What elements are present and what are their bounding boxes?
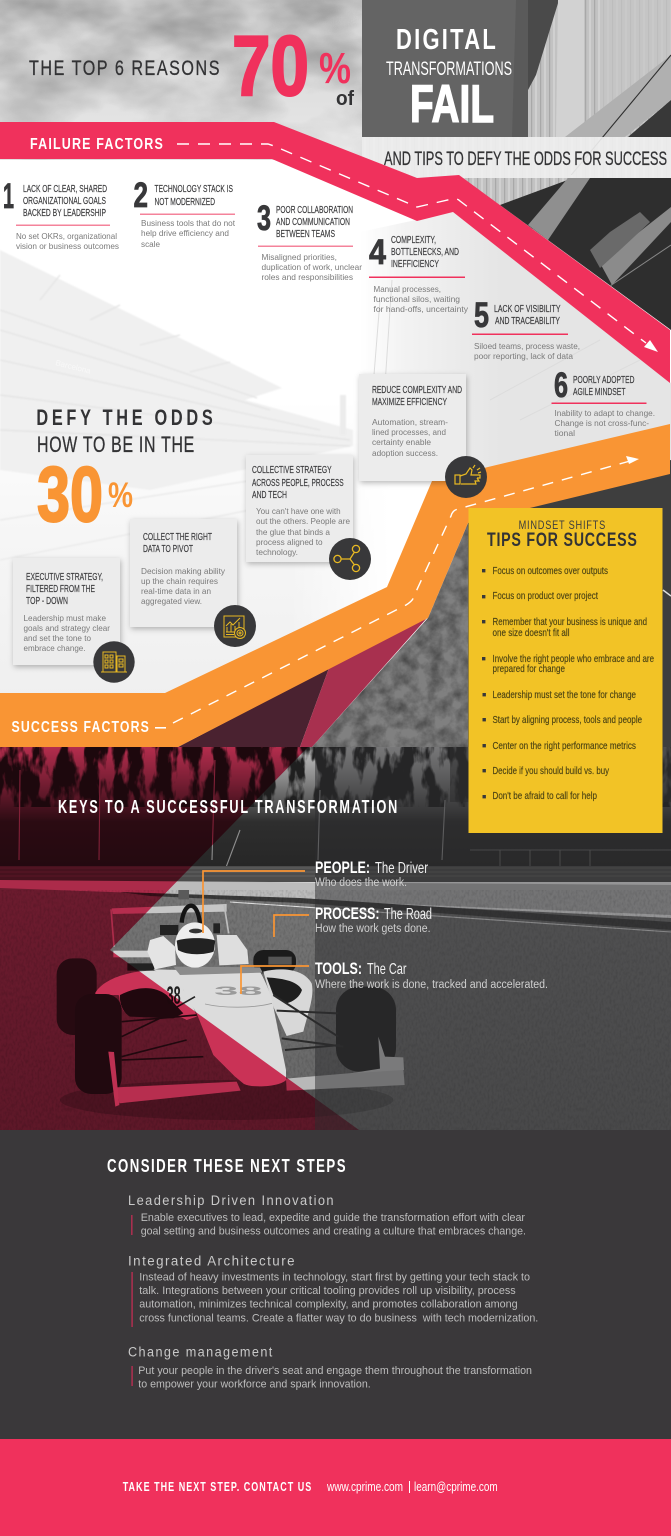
background: building facade xyxy=(362,0,671,330)
photo: racing car on track xyxy=(0,747,671,1130)
failure factor 2 xyxy=(134,176,236,249)
callout: people: The Driver xyxy=(375,860,428,877)
tips list: prepared for change xyxy=(492,663,565,675)
white band xyxy=(362,137,671,178)
step: integrated architecture: cross functional teams. Create a flatter way to do business with tech modernization. xyxy=(139,1312,538,1324)
card: collective strategy: You can't have one with xyxy=(256,506,341,516)
big 30 percent: % xyxy=(108,476,133,515)
callout: people: PEOPLE: xyxy=(315,858,370,877)
panel: tips for success: MINDSET SHIFTS xyxy=(519,518,606,532)
step: integrated architecture: Instead of heavy investments in technology, start first by getting your tech stack to xyxy=(139,1272,530,1284)
title: 70 percent of: % xyxy=(319,44,351,93)
card: reduce complexity: Automation, stream- xyxy=(372,417,448,427)
title: digital transformations fail: DIGITAL xyxy=(396,24,498,56)
callout: process: How the work gets done. xyxy=(315,923,430,935)
step: leadership driven innovation: Leadership Driven Innovation xyxy=(128,1193,335,1208)
title: digital transformations fail xyxy=(386,24,512,134)
failure factor 2: 2 xyxy=(134,176,148,215)
card: collect the right data: Decision making ability xyxy=(141,566,226,576)
step: leadership driven innovation: goal setting and business outcomes and creating a culture that embraces change. xyxy=(141,1225,526,1237)
failure factor 1: vision or business outcomes xyxy=(16,241,119,251)
failure factor 3: AND COMMUNICATION xyxy=(276,216,350,228)
failure factor 4: 4 xyxy=(369,233,386,272)
step: integrated architecture xyxy=(128,1254,538,1327)
failure factor 1: LACK OF CLEAR, SHARED xyxy=(23,183,107,195)
step: leadership driven innovation: Enable executives to lead, expedite and guide the transformation effort with clear xyxy=(141,1212,525,1224)
card: executive strategy: Leadership must make xyxy=(24,613,106,623)
failure factor 4: BOTTLENECKS, AND xyxy=(391,246,459,258)
callout: tools: TOOLS: xyxy=(315,959,362,978)
background: grandstand xyxy=(0,250,440,700)
card: reduce complexity: adoption success. xyxy=(372,448,438,458)
failure factor 6: Change is not cross-func- xyxy=(554,418,649,428)
step: leadership driven innovation xyxy=(128,1193,526,1237)
icon: buildings xyxy=(93,641,135,683)
card: collective strategy: AND TECH xyxy=(252,489,287,501)
card: executive strategy: EXECUTIVE STRATEGY, xyxy=(26,571,103,583)
heading: consider these next steps: CONSIDER THESE NEXT STEPS xyxy=(107,1156,347,1176)
failure factor 6 xyxy=(552,366,655,438)
heading: defy the odds: DEFY THE ODDS xyxy=(36,405,216,430)
failure factor 5 xyxy=(472,296,580,361)
failure factor 2: scale xyxy=(141,239,160,249)
pink failure road xyxy=(0,122,670,383)
callout: tools: The Car xyxy=(367,961,407,978)
heading: defy the odds: HOW TO BE IN THE xyxy=(37,432,195,457)
title: the top 6 reasons: THE TOP 6 REASONS xyxy=(29,57,221,80)
failure factor 5: poor reporting, lack of data xyxy=(474,351,573,361)
photo backdrop: sky and forest xyxy=(0,747,671,872)
footer: contact: learn@cprime.com xyxy=(414,1479,498,1494)
title: 70 percent of: of xyxy=(336,88,354,110)
failure factor 4: INEFFICIENCY xyxy=(391,258,439,270)
tips list: one size doesn't fit all xyxy=(492,627,570,639)
card: collect the right data: DATA TO PIVOT xyxy=(143,543,193,555)
failure factor 2: help drive efficiency and xyxy=(141,228,229,238)
step: change management: Change management xyxy=(128,1345,274,1360)
failure factor 3 xyxy=(257,199,362,282)
card: executive strategy: embrace change. xyxy=(24,643,86,653)
footer: contact xyxy=(0,1439,671,1536)
card: collect the right data: aggregated view. xyxy=(141,596,202,606)
callout: people xyxy=(203,858,428,933)
title: digital transformations fail: FAIL xyxy=(410,75,494,134)
card: executive strategy xyxy=(13,558,120,665)
tips list: Focus on outcomes over outputs xyxy=(492,565,608,577)
heading: success factors: SUCCESS FACTORS xyxy=(12,719,150,736)
card: executive strategy: goals and strategy clear xyxy=(24,623,110,633)
title: 70 percent of: 70 xyxy=(232,19,309,114)
heading: failure factors: FAILURE FACTORS xyxy=(30,136,164,153)
dark photo tint xyxy=(315,747,671,1130)
tips list xyxy=(482,565,654,802)
callout: people: Who does the work. xyxy=(315,877,407,889)
background: pale lower building reflection xyxy=(360,212,671,520)
failure factor 6: Inability to adapt to change. xyxy=(554,408,655,418)
car xyxy=(57,890,405,1120)
maroon wedge xyxy=(178,618,427,747)
background: clouds xyxy=(0,0,362,160)
failure factor 2: TECHNOLOGY STACK IS xyxy=(154,183,233,195)
card: collect the right data: real-time data in an xyxy=(141,586,211,596)
card: collective strategy: process aligned to xyxy=(256,537,323,547)
card: reduce complexity xyxy=(359,374,466,481)
icon: network share xyxy=(329,538,371,580)
failure factor 3: 3 xyxy=(257,199,271,238)
card: executive strategy: and set the tone to xyxy=(24,633,91,643)
failure factor 2: Business tools that do not xyxy=(141,218,236,228)
step: integrated architecture: automation, minimizes technical complexity, and promotes collaboration among xyxy=(139,1299,518,1311)
failure factor 6: 6 xyxy=(554,366,568,405)
failure factor 6: POORLY ADOPTED xyxy=(573,374,635,386)
callout: tools xyxy=(241,959,548,994)
card: collect the right data: up the chain requires xyxy=(141,576,218,586)
callout: process: The Road xyxy=(384,906,432,923)
card: reduce complexity: REDUCE COMPLEXITY AND xyxy=(372,384,462,396)
failure factor 1: BACKED BY LEADERSHIP xyxy=(23,207,106,219)
card: collective strategy: the glue that binds a xyxy=(256,527,330,537)
panel: tips for success xyxy=(468,508,662,833)
step: change management: Put your people in the driver's seat and engage them throughout the transformation xyxy=(138,1365,532,1377)
failure factor 4 xyxy=(369,233,469,314)
failure factor 4: for hand-offs, uncertainty xyxy=(374,304,469,314)
panel: next steps xyxy=(0,1130,671,1440)
failure factor 1: ORGANIZATIONAL GOALS xyxy=(23,195,106,207)
dark title box xyxy=(362,0,528,137)
background: grandstand: Barcelona xyxy=(55,358,92,376)
failure factor 3: Misaligned priorities, xyxy=(262,252,337,262)
pink overlay xyxy=(0,747,359,1130)
callout: tools: Where the work is done, tracked and accelerated. xyxy=(315,979,548,991)
icon: thumbs up xyxy=(445,456,487,498)
orange success road xyxy=(0,424,670,747)
card: collective strategy: ACROSS PEOPLE, PROCESS xyxy=(252,477,344,489)
card: collective strategy xyxy=(246,455,353,562)
failure factor 5: AND TRACEABILITY xyxy=(495,315,560,327)
failure factor 6: tional xyxy=(554,428,575,438)
failure factor 1 xyxy=(3,177,119,251)
step: change management: to empower your workforce and spark innovation. xyxy=(138,1378,371,1390)
step: integrated architecture: Integrated Architecture xyxy=(128,1254,296,1269)
failure factor 5: LACK OF VISIBILITY xyxy=(494,303,560,315)
footer: contact: www.cprime.com xyxy=(326,1479,403,1494)
card: reduce complexity: MAXIMIZE EFFICIENCY xyxy=(372,396,447,408)
card: reduce complexity: lined processes, and xyxy=(372,427,446,437)
tips list: Focus on product over project xyxy=(492,590,598,602)
failure factor 1: 1 xyxy=(3,177,14,216)
failure factor 6: AGILE MINDSET xyxy=(573,386,626,398)
failure factor 4: COMPLEXITY, xyxy=(391,234,436,246)
card: reduce complexity: certainty enable xyxy=(372,437,431,447)
card: collect the right data xyxy=(130,519,237,627)
callout: process: PROCESS: xyxy=(315,904,380,923)
big 30 percent: 30 xyxy=(37,450,103,538)
card: collective strategy: technology. xyxy=(256,547,298,557)
icon: chart with target xyxy=(214,605,256,647)
failure factor 5: 5 xyxy=(474,296,489,335)
callout: process xyxy=(274,904,432,937)
photo backdrop: barrier, verge and road xyxy=(0,866,671,1130)
failure factor 1: No set OKRs, organizational xyxy=(16,231,117,241)
failure factor 3: BETWEEN TEAMS xyxy=(276,228,335,240)
card: collective strategy: out the others. People are xyxy=(256,516,350,526)
car: 38 xyxy=(214,984,264,998)
failure factor 4: functional silos, waiting xyxy=(374,294,460,304)
tips list: Decide if you should build vs. buy xyxy=(492,765,610,777)
footer: contact: TAKE THE NEXT STEP. CONTACT US xyxy=(123,1479,312,1494)
heading: defy the odds xyxy=(36,405,216,457)
failure factor 5: Siloed teams, process waste, xyxy=(474,341,580,351)
title: digital transformations fail: TRANSFORMATIONS xyxy=(386,59,512,80)
failure factor 3: duplication of work, unclear xyxy=(262,262,362,272)
background: concrete track texture xyxy=(305,460,671,750)
step: integrated architecture: talk. Integrations between your critical tooling provides roll up visibility, process xyxy=(139,1285,516,1297)
card: collect the right data: COLLECT THE RIGHT xyxy=(143,531,212,543)
failure factor 3: roles and responsibilities xyxy=(262,272,353,282)
failure factor 4: Manual processes, xyxy=(374,284,441,294)
step: change management xyxy=(128,1345,532,1390)
card: collective strategy: COLLECTIVE STRATEGY xyxy=(252,464,332,476)
heading: keys to a successful transformation: KEYS TO A SUCCESSFUL TRANSFORMATION xyxy=(58,797,399,817)
tips list: Don't be afraid to call for help xyxy=(492,790,597,802)
card: executive strategy: TOP - DOWN xyxy=(26,595,68,607)
failure factor 3: POOR COLLABORATION xyxy=(276,204,353,216)
card: executive strategy: FILTERED FROM THE xyxy=(26,583,95,595)
failure factor 2: NOT MODERNIZED xyxy=(154,196,215,208)
car: 38 xyxy=(167,983,181,1010)
